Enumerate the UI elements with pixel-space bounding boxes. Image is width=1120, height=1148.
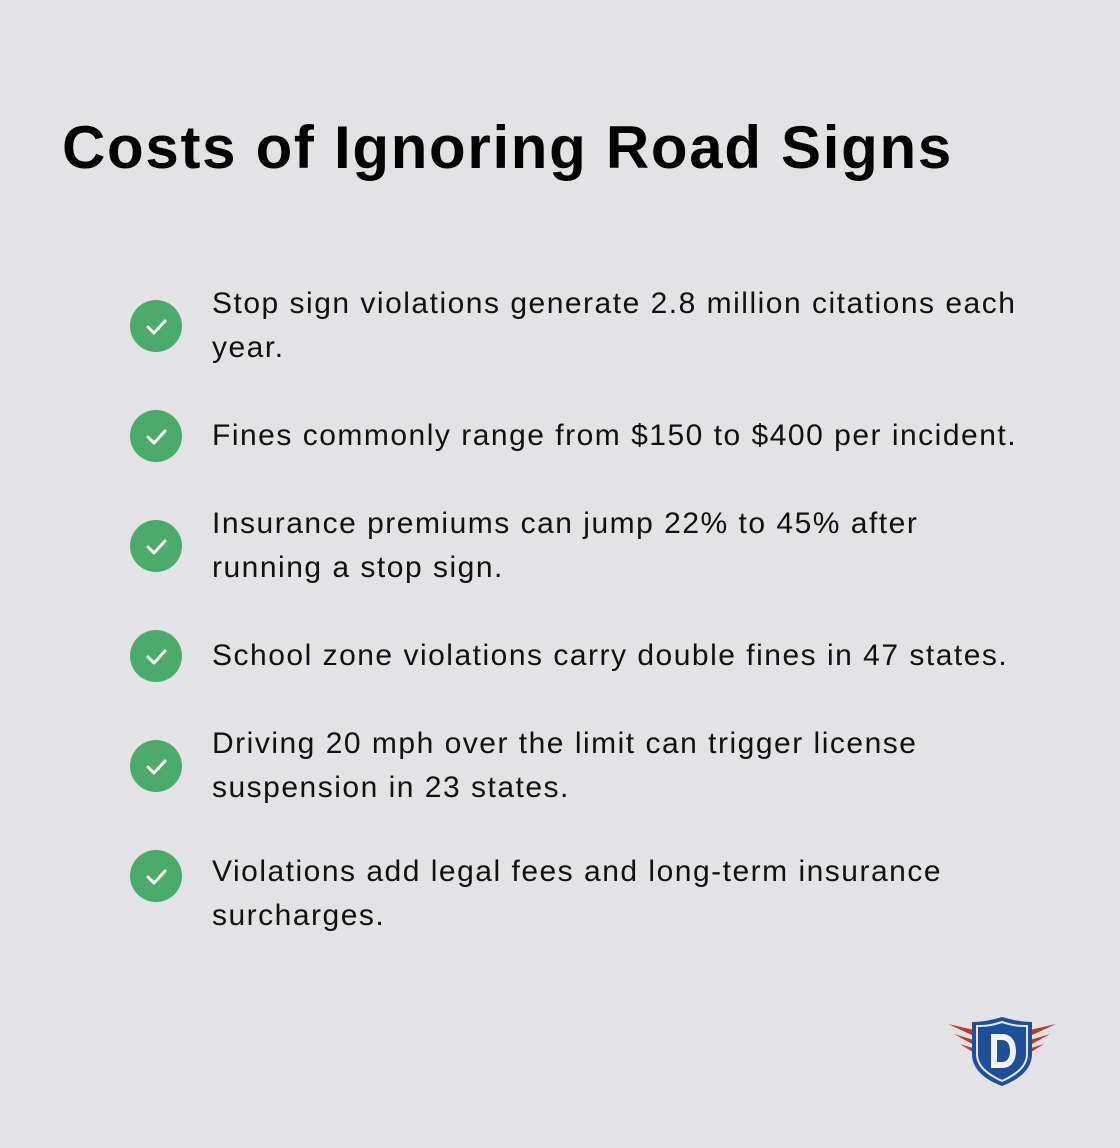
logo bbox=[948, 1017, 1056, 1086]
item 6: surcharges. bbox=[212, 899, 385, 932]
item 6 bbox=[130, 850, 942, 932]
item 1: Stop sign violations generate 2.8 million citations each bbox=[212, 287, 1016, 320]
item 2: Fines commonly range from $150 to $400 per incident. bbox=[212, 419, 1017, 452]
item 3: Insurance premiums can jump 22% to 45% after bbox=[212, 507, 918, 540]
title: Costs of Ignoring Road Signs bbox=[62, 114, 953, 181]
item 5: Driving 20 mph over the limit can trigger license bbox=[212, 727, 917, 760]
item 4: School zone violations carry double fines in 47 states. bbox=[212, 639, 1008, 672]
item 2 bbox=[130, 410, 1017, 462]
item 4 bbox=[130, 630, 1008, 682]
item 1: year. bbox=[212, 331, 285, 364]
item 6: Violations add legal fees and long-term insurance bbox=[212, 855, 942, 888]
item 5 bbox=[130, 727, 917, 804]
item 5: suspension in 23 states. bbox=[212, 771, 570, 804]
item 1 bbox=[130, 287, 1016, 364]
item 3: running a stop sign. bbox=[212, 551, 504, 584]
item 3 bbox=[130, 507, 918, 584]
